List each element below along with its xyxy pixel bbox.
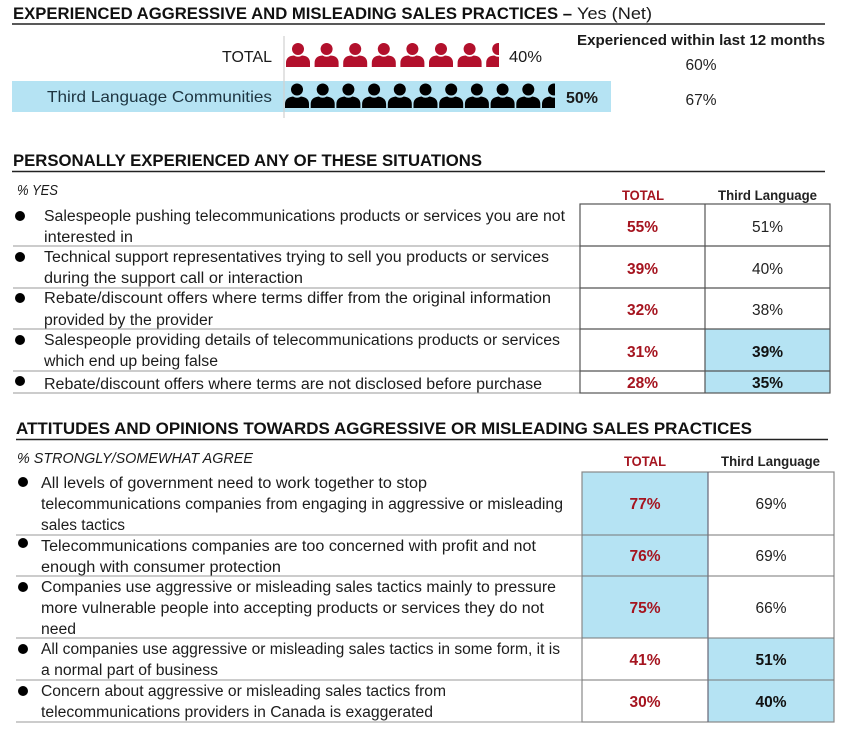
table: attitudes percentages	[16, 472, 834, 722]
column header: total: TOTAL	[622, 188, 664, 203]
list: attitude statements: All companies use aggressive or misleading sales tactics in some form, it is	[41, 641, 560, 658]
list: attitude statements	[18, 475, 563, 721]
list: attitude statements: enough with consumer protection	[41, 559, 281, 576]
list: situations statements: Rebate/discount offers where terms are not disclosed before purchase	[44, 376, 542, 393]
column header: total: TOTAL	[624, 454, 666, 469]
heading: experienced practices: EXPERIENCED AGGRESSIVE AND MISLEADING SALES PRACTICES –	[13, 4, 572, 23]
section: experienced aggressive and misleading sales practices	[12, 4, 825, 118]
list: attitude statements: Companies use aggressive or misleading sales tactics mainly to pressure	[41, 579, 556, 596]
sublabel: percent yes: % YES	[17, 183, 58, 199]
list: situations statements: during the support call or interaction	[44, 270, 303, 287]
sublabel: percent strongly or somewhat agree: % STRONGLY/SOMEWHAT AGREE	[17, 451, 253, 467]
list: situations statements: Salespeople pushing telecommunications products or services you are not	[44, 208, 566, 225]
table: situations percentages: 39%	[627, 261, 658, 278]
column: experienced within last 12 months: Experienced within last 12 months	[577, 33, 825, 49]
column header: third language: Third Language	[721, 454, 820, 469]
list: situations statements	[15, 208, 566, 393]
column: experienced within last 12 months	[577, 33, 825, 109]
label: total: TOTAL	[222, 49, 272, 66]
section: attitudes and opinions	[16, 419, 834, 722]
highlight band: third language communities	[12, 81, 611, 112]
list: attitude statements: sales tactics	[41, 517, 125, 534]
table: situations percentages: 55%	[627, 219, 658, 236]
table: attitudes percentages: 51%	[755, 652, 787, 669]
column: experienced within last 12 months: 67%	[685, 92, 717, 109]
list: attitude statements: a normal part of business	[41, 662, 218, 679]
table: attitudes percentages: 66%	[755, 600, 787, 617]
list: situations statements: Salespeople providing details of telecommunications products or services	[44, 332, 560, 349]
table: attitudes percentages: 76%	[629, 548, 661, 565]
list: attitude statements: Concern about aggressive or misleading sales tactics from	[41, 683, 446, 700]
table: situations percentages: 51%	[752, 219, 783, 236]
value: third language 50 percent: 50%	[566, 90, 598, 107]
list: attitude statements: need	[41, 621, 76, 638]
table: situations percentages: 35%	[752, 375, 783, 392]
table: situations percentages: 40%	[752, 261, 783, 278]
table: attitudes percentages: 77%	[629, 496, 661, 513]
table: situations percentages: 38%	[752, 302, 783, 319]
list: attitude statements: more vulnerable people into accepting products or services they do not	[41, 600, 545, 617]
table: attitudes percentages: 40%	[755, 694, 787, 711]
list: attitude statements: All levels of government need to work together to stop	[41, 475, 427, 492]
table: attitudes percentages: 30%	[629, 694, 661, 711]
heading: experienced practices	[12, 4, 825, 24]
icon row: third language 50 percent	[285, 84, 566, 108]
table: attitudes percentages: 41%	[629, 652, 661, 669]
list: situations statements: which end up being false	[43, 353, 218, 370]
table: situations percentages: 28%	[627, 375, 658, 392]
table: attitudes percentages: 75%	[629, 600, 661, 617]
list: situations statements: provided by the provider	[44, 312, 213, 329]
section: personally experienced situations	[12, 151, 830, 393]
table: attitudes percentages: 69%	[755, 496, 787, 513]
list: attitude statements: Telecommunications companies are too concerned with profit and not	[41, 538, 537, 555]
table: situations percentages: 31%	[627, 344, 658, 361]
table: situations percentages	[13, 204, 830, 393]
heading: personally experienced: PERSONALLY EXPERIENCED ANY OF THESE SITUATIONS	[13, 151, 482, 170]
icon row: total 40 percent	[286, 43, 510, 67]
label: third language communities: Third Language Communities	[47, 89, 272, 106]
value: total 40 percent: 40%	[509, 49, 542, 66]
list: attitude statements: telecommunications companies from engaging in aggressive or misleading	[41, 496, 563, 513]
table: attitudes percentages: 69%	[755, 548, 787, 565]
table: situations percentages: 32%	[627, 302, 658, 319]
heading: attitudes and opinions: ATTITUDES AND OPINIONS TOWARDS AGGRESSIVE OR MISLEADING SALES PRACTICES	[16, 419, 752, 438]
column header: third language: Third Language	[718, 188, 817, 203]
list: attitude statements: telecommunications providers in Canada is exaggerated	[41, 704, 433, 721]
list: situations statements: Technical support representatives trying to sell you products or services	[44, 249, 549, 266]
table: situations percentages: 39%	[752, 344, 783, 361]
list: situations statements: Rebate/discount offers where terms differ from the original information	[44, 290, 551, 307]
heading: experienced practices: Yes (Net)	[577, 4, 652, 23]
column: experienced within last 12 months: 60%	[685, 57, 717, 74]
list: situations statements: interested in	[44, 229, 133, 246]
